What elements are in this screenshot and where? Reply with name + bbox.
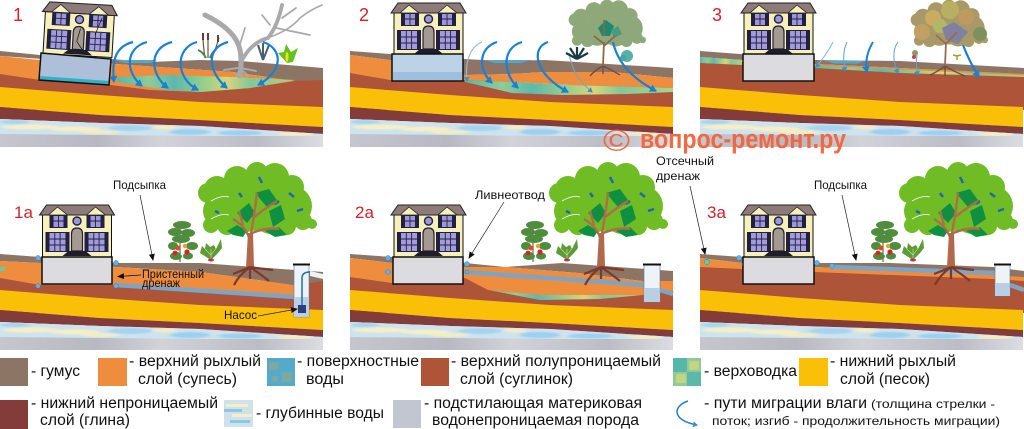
reeds <box>198 33 219 58</box>
label: Ливнеотвод <box>469 188 545 258</box>
legend: верхний полупроницаемый слой: слой (суглинок) <box>460 371 573 388</box>
foundation <box>42 257 112 284</box>
house <box>40 205 114 257</box>
tree arrow panel 2 <box>613 42 656 91</box>
panel number: 3а <box>707 203 726 222</box>
label: Ливнеотвод: Ливнеотвод <box>475 188 545 202</box>
legend: arrow and migration paths: - пути миграции влаги <box>704 395 867 412</box>
label: Отсечный дренаж: дренаж <box>656 169 700 183</box>
panel 3: site with shallow perched water <box>700 3 1024 147</box>
migration arrows <box>466 42 592 92</box>
well with pump <box>293 264 323 317</box>
label: Насос: Насос <box>224 308 257 322</box>
storm drain pipe <box>464 272 646 285</box>
panel 3a: cut-off drain <box>700 162 1024 350</box>
drain fittings <box>704 256 834 268</box>
watermark: вопрос-ремонт.ру <box>640 124 846 154</box>
soil layers <box>700 51 1024 147</box>
legend: нижний рыхлый слой: - нижний рыхлый <box>830 353 956 370</box>
tomato plant <box>871 221 901 262</box>
legend: поверхностные воды: - поверхностные <box>297 353 419 370</box>
legend: верховодка <box>673 358 797 386</box>
green tree <box>549 162 668 285</box>
tree arrow panel 3 <box>963 45 979 77</box>
watermark: © <box>603 123 630 158</box>
beet <box>556 239 578 262</box>
watermark <box>603 123 846 158</box>
legend: материковая порода: водонепроницаемая порода <box>432 412 639 429</box>
dry foundation <box>743 54 814 81</box>
panel 2: moist site, level house <box>350 3 673 147</box>
green tree <box>899 162 1018 285</box>
legend: верхний рыхлый слой: слой (супесь) <box>138 371 237 388</box>
house <box>391 205 466 257</box>
panel number: 1 <box>13 5 23 25</box>
panel 1a: wall drainage and pump <box>0 162 323 350</box>
label: Подсыпка 1a <box>113 178 166 260</box>
soil layers <box>350 51 673 147</box>
panel number: 1а <box>14 203 33 222</box>
legend <box>0 353 1000 429</box>
legend: глубинные воды <box>224 400 384 427</box>
legend: верхний полупроницаемый слой: - верхний полупроницаемый <box>451 353 661 370</box>
legend: arrow and migration paths <box>677 395 1000 428</box>
panel number: 2а <box>355 203 374 222</box>
autumn tree panel 3 <box>911 0 988 76</box>
legend: гумус <box>0 358 80 386</box>
legend: верхний рыхлый слой <box>98 353 261 388</box>
label: Подсыпка 3a: Подсыпка <box>814 178 867 192</box>
house <box>391 3 466 55</box>
legend: поверхностные воды: воды <box>306 371 344 388</box>
legend: нижний непроницаемый слой: слой (глина) <box>40 412 130 429</box>
label: Пристенный дренаж: дренаж <box>142 278 180 290</box>
foundation <box>743 257 814 284</box>
drain marker at edge <box>0 267 5 271</box>
plants panel 2 <box>566 47 633 62</box>
legend: нижний непроницаемый слой: - нижний непроницаемый <box>31 395 218 412</box>
green tree <box>198 162 317 285</box>
label: Пристенный дренаж <box>118 269 204 290</box>
label: Насос <box>224 308 297 322</box>
well and outflow <box>643 264 673 302</box>
label: Отсечный дренаж <box>656 154 714 254</box>
foundation with water film <box>392 54 463 81</box>
tomato plant <box>521 221 551 262</box>
migration arrows <box>816 42 918 75</box>
house <box>741 3 816 55</box>
drain pipe <box>116 285 296 297</box>
plants panel 3 <box>912 50 961 60</box>
panel number: 3 <box>712 5 722 25</box>
panel 1: waterlogged site, tilted house <box>0 1 323 147</box>
legend: поверхностные воды <box>267 353 419 388</box>
legend: глубинные воды: - глубинные воды <box>256 405 384 422</box>
dead tree <box>204 5 322 76</box>
callouts: lower panels <box>113 154 867 322</box>
cut-off drain pipe <box>832 267 996 273</box>
legend: материковая порода <box>393 395 642 429</box>
soil layers <box>350 254 673 350</box>
soil layers <box>0 254 323 350</box>
legend: верховодка: - верховодка <box>704 363 797 380</box>
well and outflow <box>994 264 1024 296</box>
soil layers <box>0 51 323 147</box>
migration arrows <box>113 42 278 90</box>
olive tree <box>569 0 646 76</box>
beet <box>902 239 924 262</box>
legend: материковая порода: - подстилающая материковая <box>424 395 642 412</box>
house with cracked walls <box>40 1 118 58</box>
beet <box>200 239 222 262</box>
label: Отсечный дренаж: Отсечный <box>656 154 714 168</box>
tomato plant <box>168 221 198 262</box>
legend: arrow and migration paths: поток; изгиб - продолжительность миграции) <box>712 414 1000 428</box>
flooded foundation <box>39 53 111 85</box>
panel number: 2 <box>359 5 369 25</box>
legend: нижний непроницаемый слой <box>0 395 218 429</box>
foundation <box>393 257 463 284</box>
drain fittings <box>36 256 118 288</box>
label: Подсыпка 1a: Подсыпка <box>113 178 166 192</box>
legend: верхний полупроницаемый слой <box>421 353 661 388</box>
legend: верхний рыхлый слой: - верхний рыхлый <box>129 353 261 370</box>
soil layers <box>700 254 1024 350</box>
legend: arrow and migration paths: (толщина стрелки - <box>871 397 995 411</box>
legend: нижний рыхлый слой: слой (песок) <box>840 371 930 388</box>
label: Пристенный дренаж: Пристенный <box>142 269 204 281</box>
label: Подсыпка 3a <box>814 178 867 260</box>
legend: гумус: - гумус <box>31 363 80 380</box>
legend: нижний рыхлый слой <box>799 353 956 388</box>
drain fittings <box>386 256 470 274</box>
marsh plants <box>258 43 298 63</box>
house <box>741 205 816 257</box>
panel 2a: storm drain <box>350 162 673 350</box>
